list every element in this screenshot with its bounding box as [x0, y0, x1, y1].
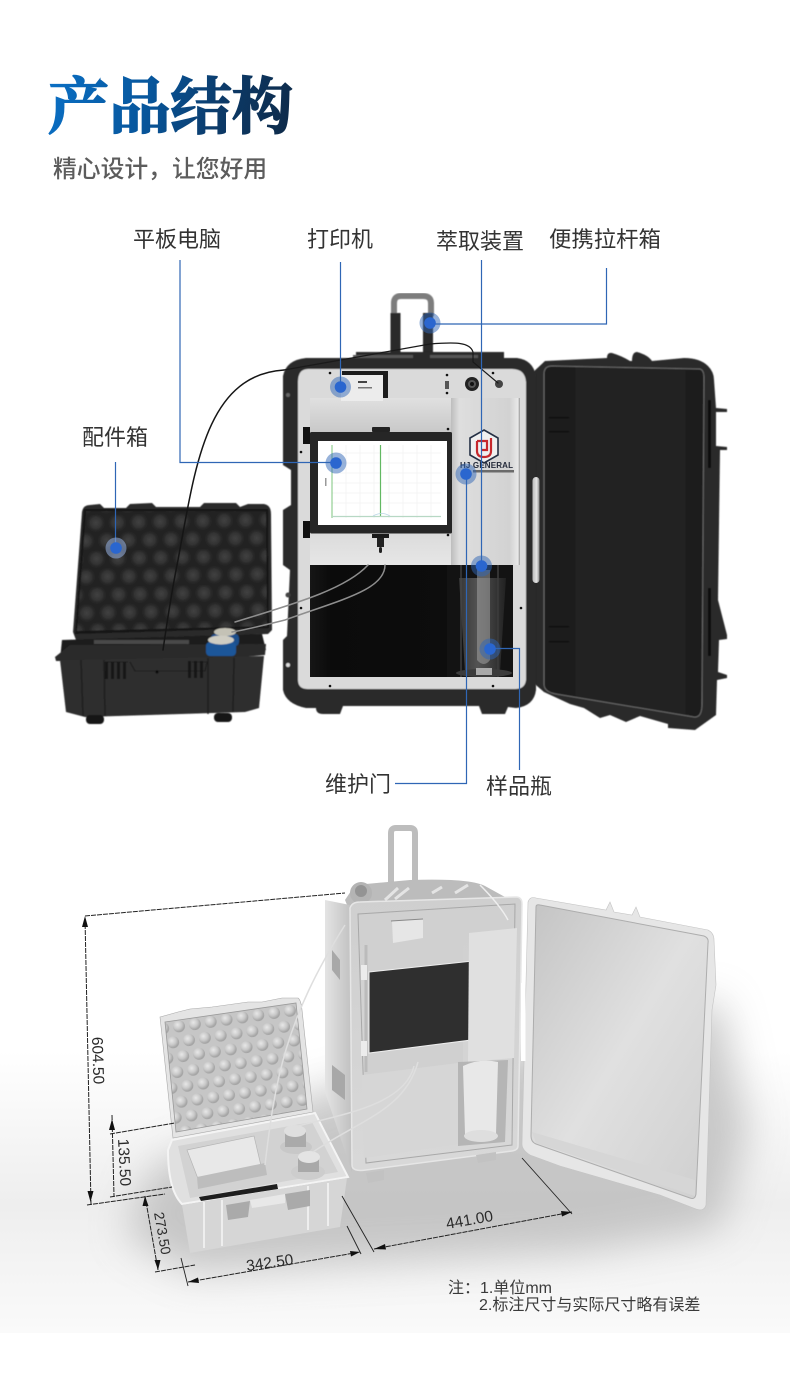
callout: accessory case: 配件箱 [82, 425, 148, 450]
callout: sample bottle [480, 638, 552, 799]
bottle 1 [280, 1125, 312, 1154]
tablet mount [372, 534, 389, 553]
callout: printer [307, 227, 373, 398]
handle [391, 828, 415, 886]
callout: trolley case [420, 227, 661, 334]
cables [163, 343, 498, 650]
black slot [199, 1184, 278, 1201]
dimension 273.50 [142, 1196, 195, 1272]
lower render: accessory case [160, 925, 418, 1253]
callout: trolley case: 便携拉杆箱 [549, 227, 661, 252]
base [168, 1113, 348, 1253]
callout: maintenance door [325, 464, 476, 797]
feet [366, 1152, 496, 1183]
callout: maintenance door: 维护门 [325, 772, 391, 797]
dimension 135.50 [109, 1115, 175, 1197]
product photo: main instrument case [163, 296, 727, 730]
case side [325, 900, 352, 1172]
case front [350, 897, 522, 1170]
product photo: accessory case [55, 503, 272, 724]
tablet back [369, 961, 473, 1053]
lower render: open lid [521, 898, 716, 1210]
callout: tablet: 平板电脑 [133, 227, 221, 252]
case top [345, 880, 505, 912]
note: 2.标注尺寸与实际尺寸略有误差 [479, 1296, 700, 1314]
dimension 342.50 [181, 1226, 361, 1286]
callout: extraction device: 萃取装置 [436, 229, 524, 254]
tray [187, 1136, 262, 1184]
callout: extraction device [436, 229, 524, 576]
logo: HJ GENERAL [460, 461, 513, 470]
dimension annotations [82, 893, 572, 1286]
lid with bumps [160, 998, 313, 1138]
dimension 273.50: 273.50 [151, 1211, 174, 1256]
extraction door with logo [451, 398, 520, 565]
callout: sample bottle: 样品瓶 [486, 774, 552, 799]
bottle 2 [291, 1151, 325, 1180]
dimension 441.00 [342, 1158, 572, 1252]
printer roll [392, 919, 423, 943]
callout: printer: 打印机 [307, 227, 373, 252]
accessory case lid [73, 503, 272, 640]
screw dots and fittings [300, 372, 522, 687]
dimension 604.50: 604.50 [88, 1037, 107, 1085]
lower render: main case [325, 828, 522, 1183]
tubing [265, 925, 418, 1165]
callout: accessory case [82, 425, 148, 558]
accessory case base [55, 628, 266, 724]
note: 注： [448, 1279, 480, 1297]
callout: tablet [133, 227, 346, 474]
printer [341, 371, 388, 401]
dimension 135.50: 135.50 [114, 1138, 133, 1187]
open lid [530, 352, 727, 730]
hinge light bar [532, 477, 540, 583]
cable [480, 885, 508, 920]
extraction module [468, 928, 517, 1062]
logo [460, 430, 514, 472]
lower render: floor shadow [0, 990, 790, 1310]
dimension 342.50: 342.50 [245, 1251, 295, 1275]
black lower compartment [310, 565, 447, 677]
note: 1.单位mm [480, 1279, 552, 1297]
telescopic handle [390, 296, 433, 354]
dimension 604.50 [82, 893, 345, 1205]
title: 产品结构 [48, 74, 293, 142]
upper panel [310, 398, 452, 565]
case shell [283, 352, 536, 714]
subtitle: 精心设计，让您好用 [53, 156, 267, 183]
tablet [310, 432, 452, 534]
sample cylinder [458, 1060, 508, 1146]
dimension 441.00: 441.00 [445, 1208, 495, 1233]
note [448, 1279, 700, 1314]
sample bottles in accessory case [206, 628, 239, 656]
sample bay [447, 565, 513, 677]
